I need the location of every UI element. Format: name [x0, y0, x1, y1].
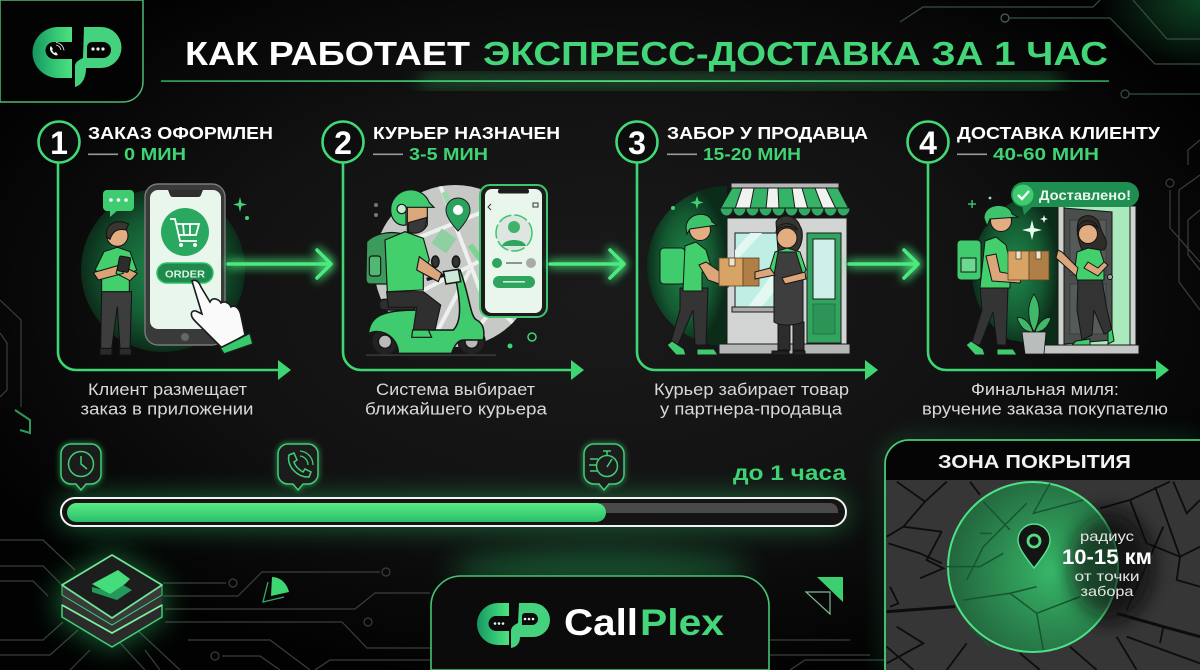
- step 2 heading: 3-5 МИН: [409, 144, 488, 164]
- brand panel: [431, 548, 769, 670]
- isometric layers icon: [59, 552, 165, 650]
- illustration: courier picks parcel at shop: [647, 183, 850, 355]
- arrow 1 to 2: [228, 250, 331, 278]
- caption 2: ближайшего курьера: [365, 400, 548, 418]
- brand name: Call: [564, 602, 638, 643]
- scooter: [368, 256, 485, 355]
- step 4 heading: 4: [919, 125, 937, 161]
- shop: [719, 183, 850, 354]
- circle road traces: [947, 483, 1083, 650]
- progress bar: [60, 497, 847, 527]
- caption 2: Система выбирает: [376, 381, 535, 399]
- step 3 connector: [637, 163, 878, 380]
- caption 3: у партнера-продавца: [660, 400, 843, 418]
- logo corner panel: [0, 0, 143, 102]
- dark text halo: [1062, 508, 1154, 624]
- step 4 heading: [908, 122, 1161, 164]
- caption 3: Курьер забирает товар: [654, 381, 849, 399]
- radius text: радиус: [1080, 528, 1134, 544]
- step 1 connector: [58, 163, 291, 380]
- street map: [887, 482, 1200, 670]
- pointing hand: [191, 280, 253, 354]
- courier rider: [366, 190, 442, 337]
- title: КАК РАБОТАЕТ: [185, 36, 471, 73]
- step 2 heading: 2: [334, 125, 352, 161]
- caption 4: вручение заказа покупателю: [922, 400, 1168, 418]
- step 1 heading: 1: [50, 125, 68, 161]
- brand logo: [477, 603, 550, 648]
- parcel: [719, 258, 759, 286]
- radius text: от точки: [1074, 568, 1140, 584]
- radius text: 10-15 км: [1062, 546, 1152, 569]
- courier: [660, 214, 732, 355]
- shopkeeper: [755, 216, 806, 355]
- courier: [957, 205, 1022, 355]
- step 2 heading: КУРЬЕР НАЗНАЧЕН: [373, 123, 560, 143]
- caption 4: Финальная миля:: [971, 381, 1119, 399]
- delivered bubble: [1011, 182, 1139, 215]
- icon: clock marker: [61, 444, 101, 490]
- chat bubble: [103, 190, 134, 217]
- icon: stopwatch marker: [584, 444, 624, 490]
- coverage circle: [948, 482, 1118, 652]
- step 4 heading: ДОСТАВКА КЛИЕНТУ: [957, 123, 1161, 143]
- step 3 heading: [616, 122, 868, 164]
- step 2 connector: [343, 163, 584, 380]
- small corner mark: [15, 410, 30, 433]
- icon: phone marker: [278, 444, 318, 490]
- radius text: забора: [1080, 583, 1134, 599]
- location pin: [1018, 524, 1050, 568]
- radius text: [1062, 528, 1152, 599]
- caption 1: заказ в приложении: [80, 400, 254, 418]
- logo CP: [33, 27, 122, 87]
- dark text halo over circle: [1068, 516, 1148, 616]
- parcel: [1008, 251, 1049, 280]
- decorative triangle right: [806, 577, 843, 614]
- step 1 heading: [38, 122, 273, 164]
- caption 1: Клиент размещает: [88, 381, 247, 399]
- panel border: [885, 440, 1200, 670]
- potted plant: [1017, 294, 1051, 354]
- duration label: до 1 часа: [733, 462, 846, 485]
- step 4 connector: [928, 163, 1169, 380]
- coverage zone panel: [884, 439, 1200, 670]
- arrow 3 to 4: [849, 250, 918, 278]
- map pin: [446, 198, 470, 231]
- step 3 heading: ЗАБОР У ПРОДАВЦА: [667, 123, 868, 143]
- delivered bubble: Доставлено!: [1039, 187, 1131, 203]
- sparkles: [968, 197, 1048, 240]
- sparkles: [233, 197, 249, 220]
- brand name: Plex: [640, 602, 724, 643]
- customer woman: [1056, 216, 1114, 345]
- customer: [93, 222, 137, 355]
- title: [185, 36, 1108, 73]
- smartphone: ORDER: [165, 268, 205, 280]
- illustration: courier hands parcel to customer: [957, 182, 1139, 355]
- smartphone: [145, 184, 225, 345]
- title underline: [161, 76, 1109, 86]
- step 3 heading: 3: [628, 125, 646, 161]
- arrow 2 to 3: [550, 250, 624, 278]
- title: ЭКСПРЕСС-ДОСТАВКА ЗА 1 ЧАС: [483, 36, 1108, 73]
- step 4 heading: 40-60 МИН: [993, 144, 1099, 164]
- illustration: customer ordering on phone: [81, 184, 253, 355]
- dots: [374, 203, 536, 348]
- step 1 heading: ЗАКАЗ ОФОРМЛЕН: [88, 123, 273, 143]
- decorative triangle left: [263, 577, 289, 602]
- door: [1042, 206, 1139, 354]
- illustration: courier on scooter with map and phone: [366, 185, 547, 356]
- panel header: ЗОНА ПОКРЫТИЯ: [938, 451, 1131, 472]
- step 2 heading: [322, 122, 560, 164]
- panel header: [884, 439, 1200, 480]
- courier app phone: [480, 185, 547, 317]
- map disc: [376, 185, 517, 347]
- step 1 heading: 0 МИН: [124, 144, 186, 164]
- step 3 heading: 15-20 МИН: [703, 144, 801, 164]
- corner glow top right: [1100, 0, 1200, 70]
